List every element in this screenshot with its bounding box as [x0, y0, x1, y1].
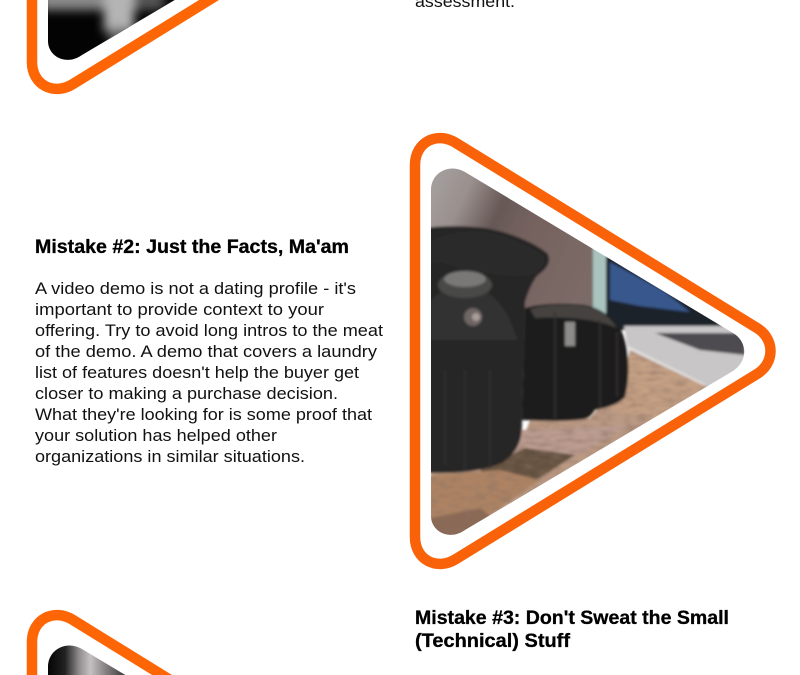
- photo: camera on wooden table: [431, 168, 744, 535]
- text block: mistake 2 body: [35, 280, 383, 466]
- triangle frame: bottom left photo: [32, 615, 175, 675]
- camera body: [425, 226, 549, 473]
- text block: mistake 2 body: organizations in similar situations.: [35, 448, 305, 466]
- camera lens: [522, 304, 628, 421]
- heading: mistake 3: (Technical) Stuff: [415, 631, 571, 652]
- photo: top left grayscale: [48, 0, 175, 60]
- triangle frame: top left photo: [32, 0, 222, 89]
- text block: mistake 2 body: What they're looking for is some proof that: [35, 406, 372, 424]
- text block: mistake 2 body: list of features doesn't help the buyer get: [35, 364, 359, 382]
- text block: mistake 2 body: A video demo is not a dating profile - it's: [35, 280, 356, 298]
- heading: mistake 3: Mistake #3: Don't Sweat the Small: [415, 608, 729, 629]
- text block: mistake 2 body: your solution has helped other: [35, 427, 278, 445]
- camera dial: [437, 276, 493, 298]
- heading: mistake 3: [415, 608, 729, 652]
- heading: mistake 2: Mistake #2: Just the Facts, Ma'am: [35, 237, 349, 258]
- photo: bottom left grayscale: [48, 646, 126, 675]
- text block: mistake 2 body: offering. Try to avoid long intros to the meat: [35, 322, 383, 340]
- wooden table: [431, 350, 708, 516]
- text block: mistake 2 body: important to provide context to your: [35, 301, 325, 319]
- triangle frame: camera photo: [415, 138, 770, 564]
- text block: mistake 2 body: of the demo. A demo that covers a laundry: [35, 343, 378, 361]
- text block: mistake 2 body: closer to making a purchase decision.: [35, 385, 338, 403]
